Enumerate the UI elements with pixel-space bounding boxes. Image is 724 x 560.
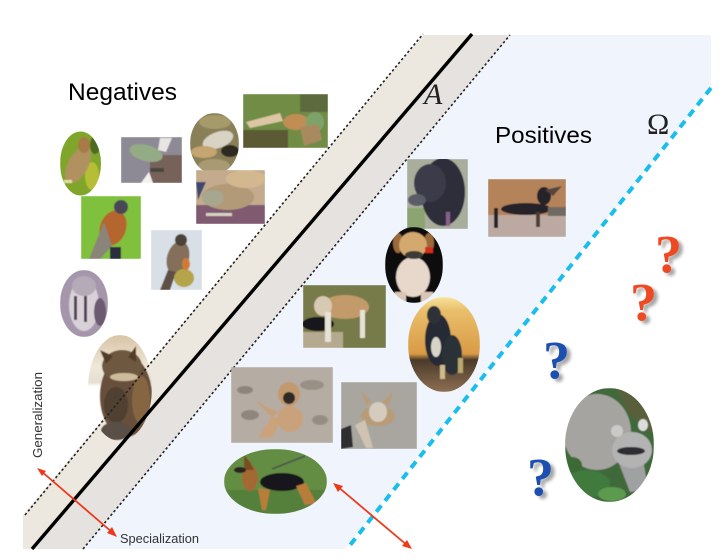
image: large owl xyxy=(88,335,152,441)
question mark: blue lower: ? xyxy=(527,447,554,507)
label: A: A xyxy=(422,78,443,111)
arrow: generalization to specialization xyxy=(37,468,117,537)
image: small owl xyxy=(60,270,108,337)
image: tan dog on sand xyxy=(231,367,333,443)
image: german shepherd xyxy=(224,449,327,514)
panel: specialization band xyxy=(32,35,510,549)
arrow: span to omega xyxy=(333,483,412,549)
label: Specialization: Specialization xyxy=(120,532,199,546)
question mark: blue upper: ? xyxy=(543,330,570,390)
image: beagle xyxy=(302,285,386,348)
image: frog on grass xyxy=(243,94,328,148)
image: raccoon xyxy=(562,388,654,502)
heading: Negatives: Negatives xyxy=(68,79,177,106)
panel: positive region xyxy=(83,35,711,549)
boundary: black concept line A xyxy=(32,34,472,549)
boundary: upper dotted line xyxy=(25,34,423,515)
image: green frog on rock xyxy=(121,137,182,183)
image: dachshund xyxy=(488,179,566,237)
question mark: red lower: ? xyxy=(630,272,657,332)
image: robin on branch xyxy=(151,230,202,290)
panel: generalization band xyxy=(23,35,472,549)
heading: Positives: Positives xyxy=(495,122,592,148)
boundary: cyan dashed line omega xyxy=(347,88,711,549)
boundary: lower dotted line xyxy=(83,35,510,549)
image: cedar waxwing xyxy=(60,131,102,196)
image: robin on green xyxy=(81,196,141,259)
label: Omega: Ω xyxy=(647,108,669,141)
image: frog on leaves xyxy=(190,113,239,174)
image: brown toad xyxy=(196,170,266,224)
question mark: red upper: ? xyxy=(655,224,682,284)
image: dog lying on sand xyxy=(341,382,417,449)
image: golden puppy xyxy=(385,227,443,304)
label: Generalization: Generalization xyxy=(31,372,45,458)
image: boxer xyxy=(408,297,480,392)
image: black dog xyxy=(407,158,468,229)
